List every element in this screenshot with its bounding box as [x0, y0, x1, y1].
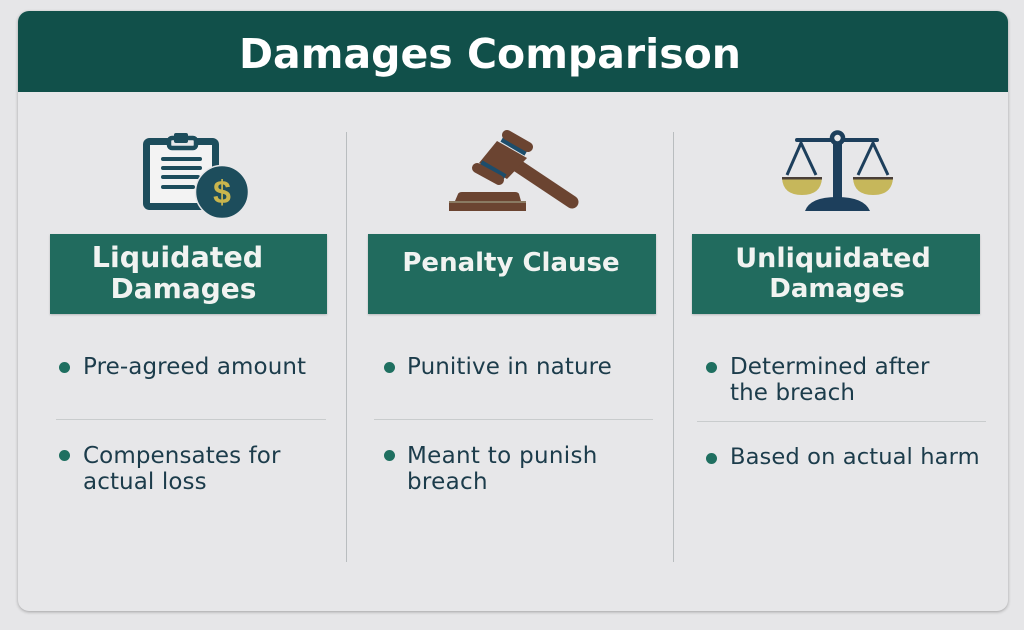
icon: scales — [782, 130, 893, 211]
heading: unliquidated damages: Unliquidated — [735, 243, 931, 274]
bullet: punitive in nature: Punitive in nature — [407, 354, 612, 380]
title banner — [18, 11, 1008, 92]
bullet: meant to punish breach: breach — [407, 469, 488, 495]
heading: penalty clause: Penalty Clause — [402, 248, 620, 278]
panel: liquidated damages — [49, 234, 328, 495]
bullet: meant to punish breach — [407, 443, 598, 495]
bullet: compensates for actual loss: Compensates for — [83, 443, 281, 469]
bullet: compensates for actual loss — [83, 443, 281, 495]
bullet: determined after the breach: Determined after — [730, 354, 930, 380]
heading: unliquidated damages: Damages — [769, 274, 905, 304]
bullet: pre-agreed amount: Pre-agreed amount — [83, 354, 306, 380]
bullet: based on actual harm: Based on actual harm — [730, 444, 980, 470]
bullet: meant to punish breach: Meant to punish — [407, 443, 598, 469]
heading: unliquidated damages — [692, 234, 980, 314]
panel: unliquidated damages — [691, 234, 986, 470]
heading: liquidated damages: Liquidated — [92, 241, 263, 274]
bullet: determined after the breach — [730, 354, 930, 406]
title: Damages Comparison — [239, 30, 741, 78]
panel: penalty clause — [367, 234, 657, 495]
bullet: determined after the breach: the breach — [730, 380, 855, 406]
icon: clipboard with dollar — [143, 133, 248, 218]
heading: penalty clause — [368, 234, 656, 314]
heading: liquidated damages — [50, 234, 327, 314]
icon: clipboard with dollar: $ — [213, 174, 231, 210]
icon: gavel — [449, 130, 578, 211]
bullet: compensates for actual loss: actual loss — [83, 469, 207, 495]
heading: liquidated damages: Damages — [111, 272, 256, 305]
